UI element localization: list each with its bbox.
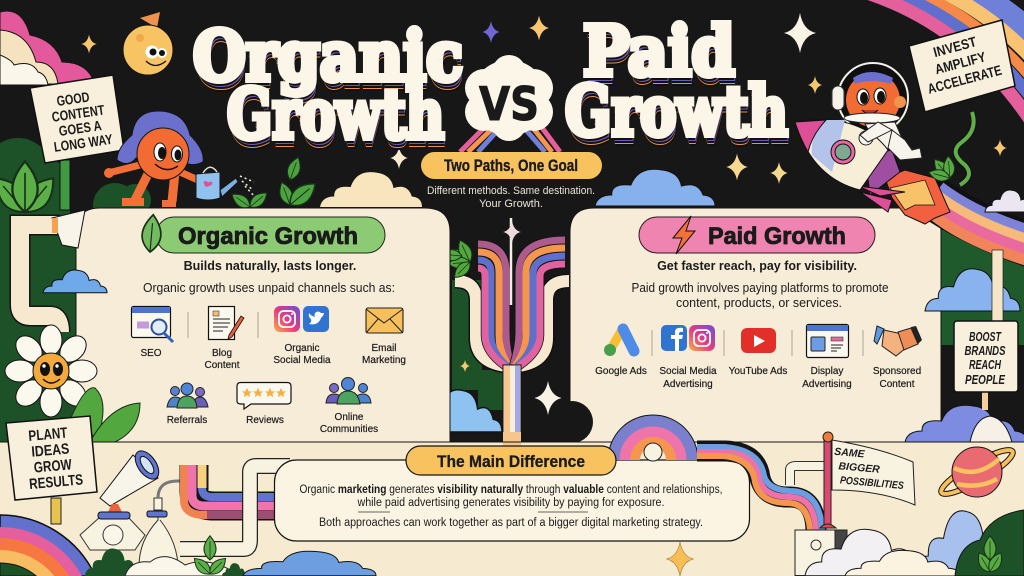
flag: same bigger possibilities [790,432,915,528]
sign: plant ideas [6,416,97,524]
item: display advertising: Display [811,366,843,377]
black corner blob [551,401,593,443]
item: google ads: Google Ads [595,366,647,377]
sign: invest amplify accelerate: INVEST [932,33,979,60]
tagline: organic: Builds naturally, lasts longer. [184,259,356,273]
item: youtube ads [729,328,787,377]
cloud: cream top [320,172,422,207]
exhaust trail [925,187,1024,263]
flame [885,170,950,224]
sign: plant ideas: RESULTS [28,471,84,493]
panel: organic growth background [76,208,450,442]
item: referrals [167,383,208,426]
pill: the main difference: The Main Difference [437,453,585,471]
text: organic description: Organic growth uses unpaid channels such as: [143,281,395,295]
pipe: wavy rainbow to machine [697,447,822,530]
sign: boost brands [954,250,1018,392]
item: organic social media: Social Media [273,355,331,366]
panel: bottom band [0,442,1024,576]
sign: invest amplify accelerate [909,20,1015,112]
connector rainbows under VS [460,125,560,152]
sign: boost brands: BRANDS [964,343,1006,358]
character: girl with watering can [104,111,203,207]
plants: left [0,161,62,219]
text: Growth [565,72,788,152]
icon: flower [5,325,97,417]
text: Organic [193,17,463,97]
cloud: top-left pink and cream [0,11,95,85]
item: reviews: Reviews [246,415,284,426]
subtitle text: Your Growth. [479,198,543,210]
item: online communities [320,378,378,435]
sign: boost brands: REACH [969,357,1001,372]
plant and vine near rocket [927,112,974,185]
panel: paid growth background [570,208,941,442]
cloud: blue right [925,269,1020,311]
plant: leaves under flower [70,388,140,442]
pipe: bottom vertical overlay [180,466,290,549]
pill: two paths, one goal: Two Paths, One Goal [444,156,578,175]
heading: organic growth [141,214,385,253]
icon: rocket [795,120,905,212]
machine box [795,530,847,576]
badge: VS cloud [465,55,553,141]
text: paid description [632,281,889,310]
heading: organic growth: Organic Growth [178,223,358,250]
item: reviews [237,382,291,426]
plants: sprouts [229,155,321,212]
text: paid description: content, products, or services. [676,296,842,310]
item: SEO [132,306,173,359]
stars [81,13,1007,415]
item: social media advertising: Social Media [659,366,717,377]
icon: moon [123,12,173,75]
subtitle text [427,185,595,210]
cloud: centre blue [415,390,502,432]
item: sponsored content [873,326,922,390]
item: youtube ads: YouTube Ads [729,366,787,377]
item: google ads [595,328,647,377]
pipe: left elbow [20,210,85,332]
title: Paid Growth [564,12,790,152]
item: email marketing: Marketing [362,355,406,366]
cloud: purple blue right [905,392,1024,442]
stem lower section [503,432,521,447]
pipe: bottom left rainbow [184,465,280,515]
heading: paid growth [639,216,875,254]
item: online communities: Communities [320,424,378,435]
sign: good content: LONG WAY [53,131,114,155]
divider: bottom band top line [0,441,1024,443]
cloud: blue left [43,270,107,293]
plumbing: bottle [139,481,180,576]
item: referrals: Referrals [167,415,207,426]
sign: good content: GOES A [58,117,103,139]
item: sponsored content: Content [879,379,915,390]
item: social media advertising [659,325,717,390]
item: display advertising: Advertising [802,379,852,390]
subtitle text: Different methods. Same destination. [427,185,595,197]
rainbow: arch bottom centre right [608,415,698,461]
rainbow: bottom left arch [0,515,95,576]
text: Growth [227,75,444,155]
sign: good content [30,75,124,210]
item: blog content: Content [204,360,240,371]
sign: good content: CONTENT [51,102,106,125]
centre rainbow pipes [455,218,569,366]
flag: same bigger possibilities: SAME [834,446,866,461]
tagline: paid: Get faster reach, pay for visibility. [657,259,857,273]
sign: boost brands: BOOST [969,329,1002,344]
centre pipe stem [503,365,521,447]
item: online communities: Online [335,412,364,423]
box: main difference: Organic marketing generates visibility naturally through valuable content and relationships, [300,484,722,496]
item: blog content [204,306,244,371]
item: blog content: Blog [212,348,232,359]
sign: invest amplify accelerate: AMPLIFY [933,48,988,77]
item: organic social media [273,306,331,366]
plant: bottom right bush [955,510,1024,576]
pill: the main difference [406,446,616,475]
box: main difference: while paid advertising generates visibility by paying for exposure. [357,497,664,509]
icon: leaf sprig centre [440,238,475,281]
clouds: bottom right [805,511,1010,576]
star: bottom gold [666,542,694,576]
item: display advertising [802,324,852,390]
heading: paid growth: Paid Growth [708,223,846,250]
icon: watering can [196,167,254,200]
box: main difference [274,460,750,541]
flag: same bigger possibilities: POSSIBILITIES [839,474,904,492]
item: email marketing: Email [371,343,397,354]
sign: boost brands: PEOPLE [965,372,1005,387]
item: email marketing [362,308,406,366]
badge: VS cloud: VS [479,77,539,131]
dividers [188,312,863,356]
flag: same bigger possibilities: BIGGER [838,460,881,476]
text: paid description: Paid growth involves paying platforms to promote [632,281,889,295]
title: Organic Growth [192,17,464,155]
item: SEO: SEO [140,348,162,359]
text: Paid [583,12,735,92]
sign: plant ideas: GROW [33,456,73,477]
icon: telescope [80,447,164,550]
sign: plant ideas: PLANT [28,425,68,445]
icon: planet [937,444,1017,500]
pill: two paths, one goal [421,152,602,179]
character: astronaut body [832,63,908,150]
box: main difference: Both approaches can work together as part of a bigger digital marketing strategy. [319,517,703,529]
item: social media advertising: Advertising [663,379,713,390]
item: sponsored content: Sponsored [873,366,921,377]
sign: good content: GOOD [56,89,90,109]
cloud: blue top [595,169,715,206]
background: green patches [0,138,1024,445]
clouds and plants: bottom left [85,536,376,576]
sign: invest amplify accelerate: ACCELERATE [926,62,1003,97]
rainbow: top right [870,0,1024,135]
item: organic social media: Organic [284,343,320,354]
cloud: white right of rocket [985,190,1024,212]
sign: plant ideas: IDEAS [31,440,70,461]
character: astronaut hand and boot [859,122,922,160]
